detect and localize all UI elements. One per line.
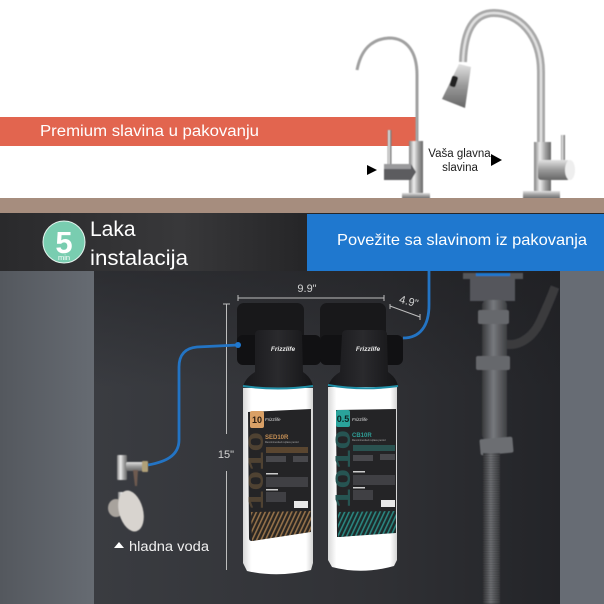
badge: 5 min [43,221,85,263]
product label: 1010 [245,432,268,510]
filter: CB10R [320,303,403,571]
filter: SED10R [235,303,321,574]
product label: 1010 [332,430,355,508]
product label: 0.5 [337,414,349,424]
mounting head: Frizzlife [271,346,295,353]
banner: connect to faucet: Povežite sa slavinom iz pakovanja [337,232,587,249]
dimension: height 15 in [218,304,234,570]
dimension: width 9.9 in: 9.9" [297,283,317,295]
product label: Recommended replace period [265,441,299,444]
mounting head [320,303,403,387]
heading: easy installation: Laka [90,218,136,241]
product label [332,409,396,537]
product label: SED10R [265,435,289,441]
icon: T-adapter valve [117,455,148,486]
dark header band [0,213,604,271]
label: cold water: hladna voda [129,539,210,554]
product label: 10 [252,415,262,425]
countertop [0,198,604,213]
badge: 5 min: min [58,253,70,262]
product label: Frizzlife [352,417,368,422]
product label: Frizzlife [265,417,281,422]
pipe: cold water inlet [148,345,238,465]
dimension: width 9.9 in [238,283,384,301]
label: your main faucet: Vaša glavna [428,148,491,160]
icon: angle stop valve [108,488,148,534]
mounting head [235,303,321,387]
banner: premium faucet: Premium slavina u pakovanju [40,123,259,140]
cartridge body [328,387,397,571]
mounting head: Frizzlife [356,346,380,353]
label: your main faucet: slavina [442,162,478,174]
arrow: included faucet marker [367,165,377,175]
product label: CB10R [352,433,372,439]
pipe: faucet outlet [403,271,429,338]
banner: connect to faucet [307,214,604,271]
cartridge body [243,388,313,574]
dimension: depth 4.9 in [390,294,420,320]
heading: easy installation: instalacija [90,247,188,270]
dimension: height 15 in: 15" [218,449,234,461]
badge: 5 min: 5 [55,225,73,260]
drain assembly [463,273,555,604]
icon: included small faucet [357,38,430,199]
dimension: depth 4.9 in: 4.9" [398,294,420,310]
arrow: main faucet marker [491,154,502,166]
banner: premium faucet [0,117,416,146]
icon: main kitchen faucet [442,13,575,199]
product label [245,409,311,541]
product label: Recommended replace period [352,439,386,442]
